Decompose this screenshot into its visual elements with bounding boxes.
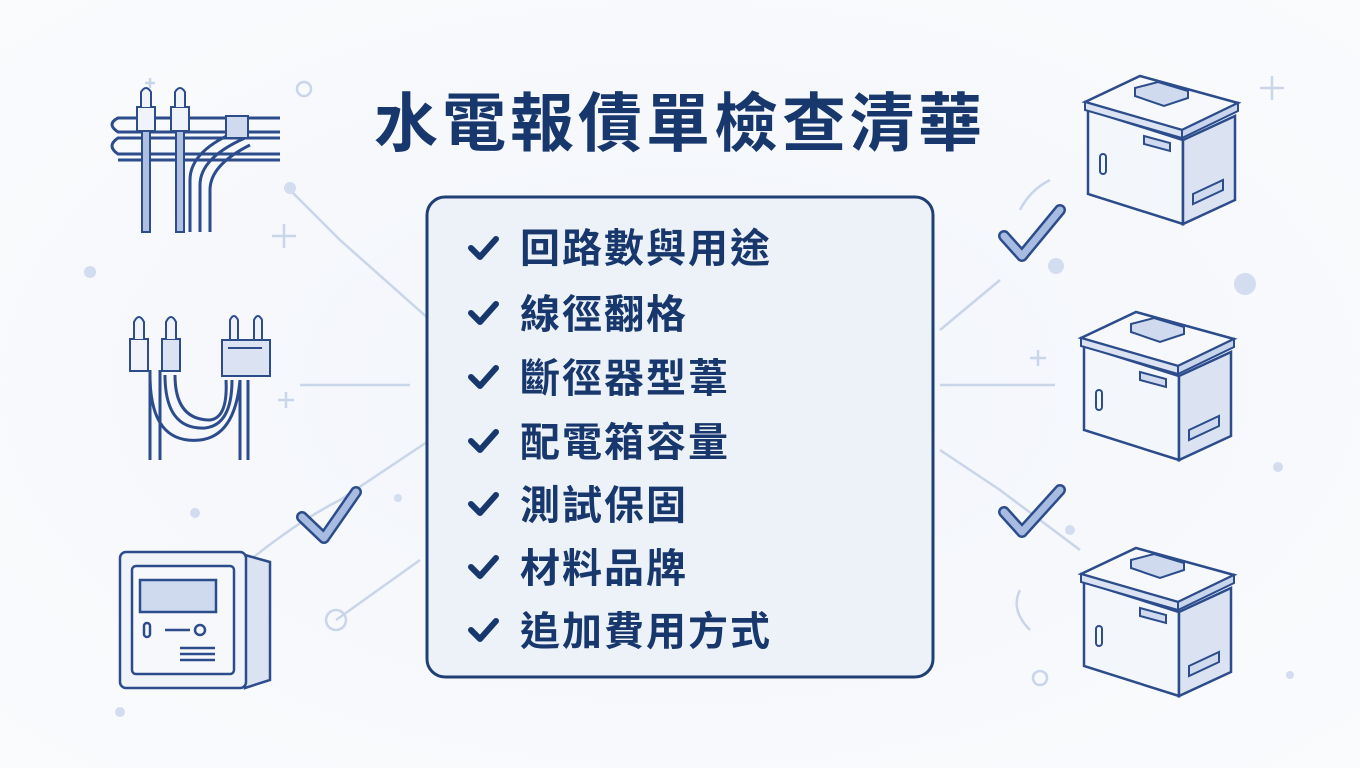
panel: checklist xyxy=(427,197,933,677)
background network lines xyxy=(145,76,1284,685)
icon: box 2 xyxy=(1081,312,1234,460)
icon: box 1 xyxy=(1085,76,1238,224)
item 4: 配電箱容量 xyxy=(520,421,730,465)
item 1: 回路數與用途 xyxy=(520,227,772,271)
icon: check right bottom xyxy=(1004,490,1060,532)
item 3: 斷徑器型葦 xyxy=(520,357,730,401)
icon: meter box xyxy=(120,552,270,688)
icon: box 3 xyxy=(1081,548,1234,696)
icon: wires top-left xyxy=(112,88,280,232)
icon: check right top xyxy=(1004,210,1060,256)
icon: check left xyxy=(302,492,356,538)
title: 水電報債單檢查清華 xyxy=(374,88,986,160)
icon: U-shaped wires xyxy=(130,316,270,460)
item 6: 材料品牌 xyxy=(520,547,688,591)
item 2: 線徑翻格 xyxy=(520,293,688,337)
item 5: 測試保固 xyxy=(520,484,688,528)
item 7: 追加費用方式 xyxy=(520,610,772,654)
